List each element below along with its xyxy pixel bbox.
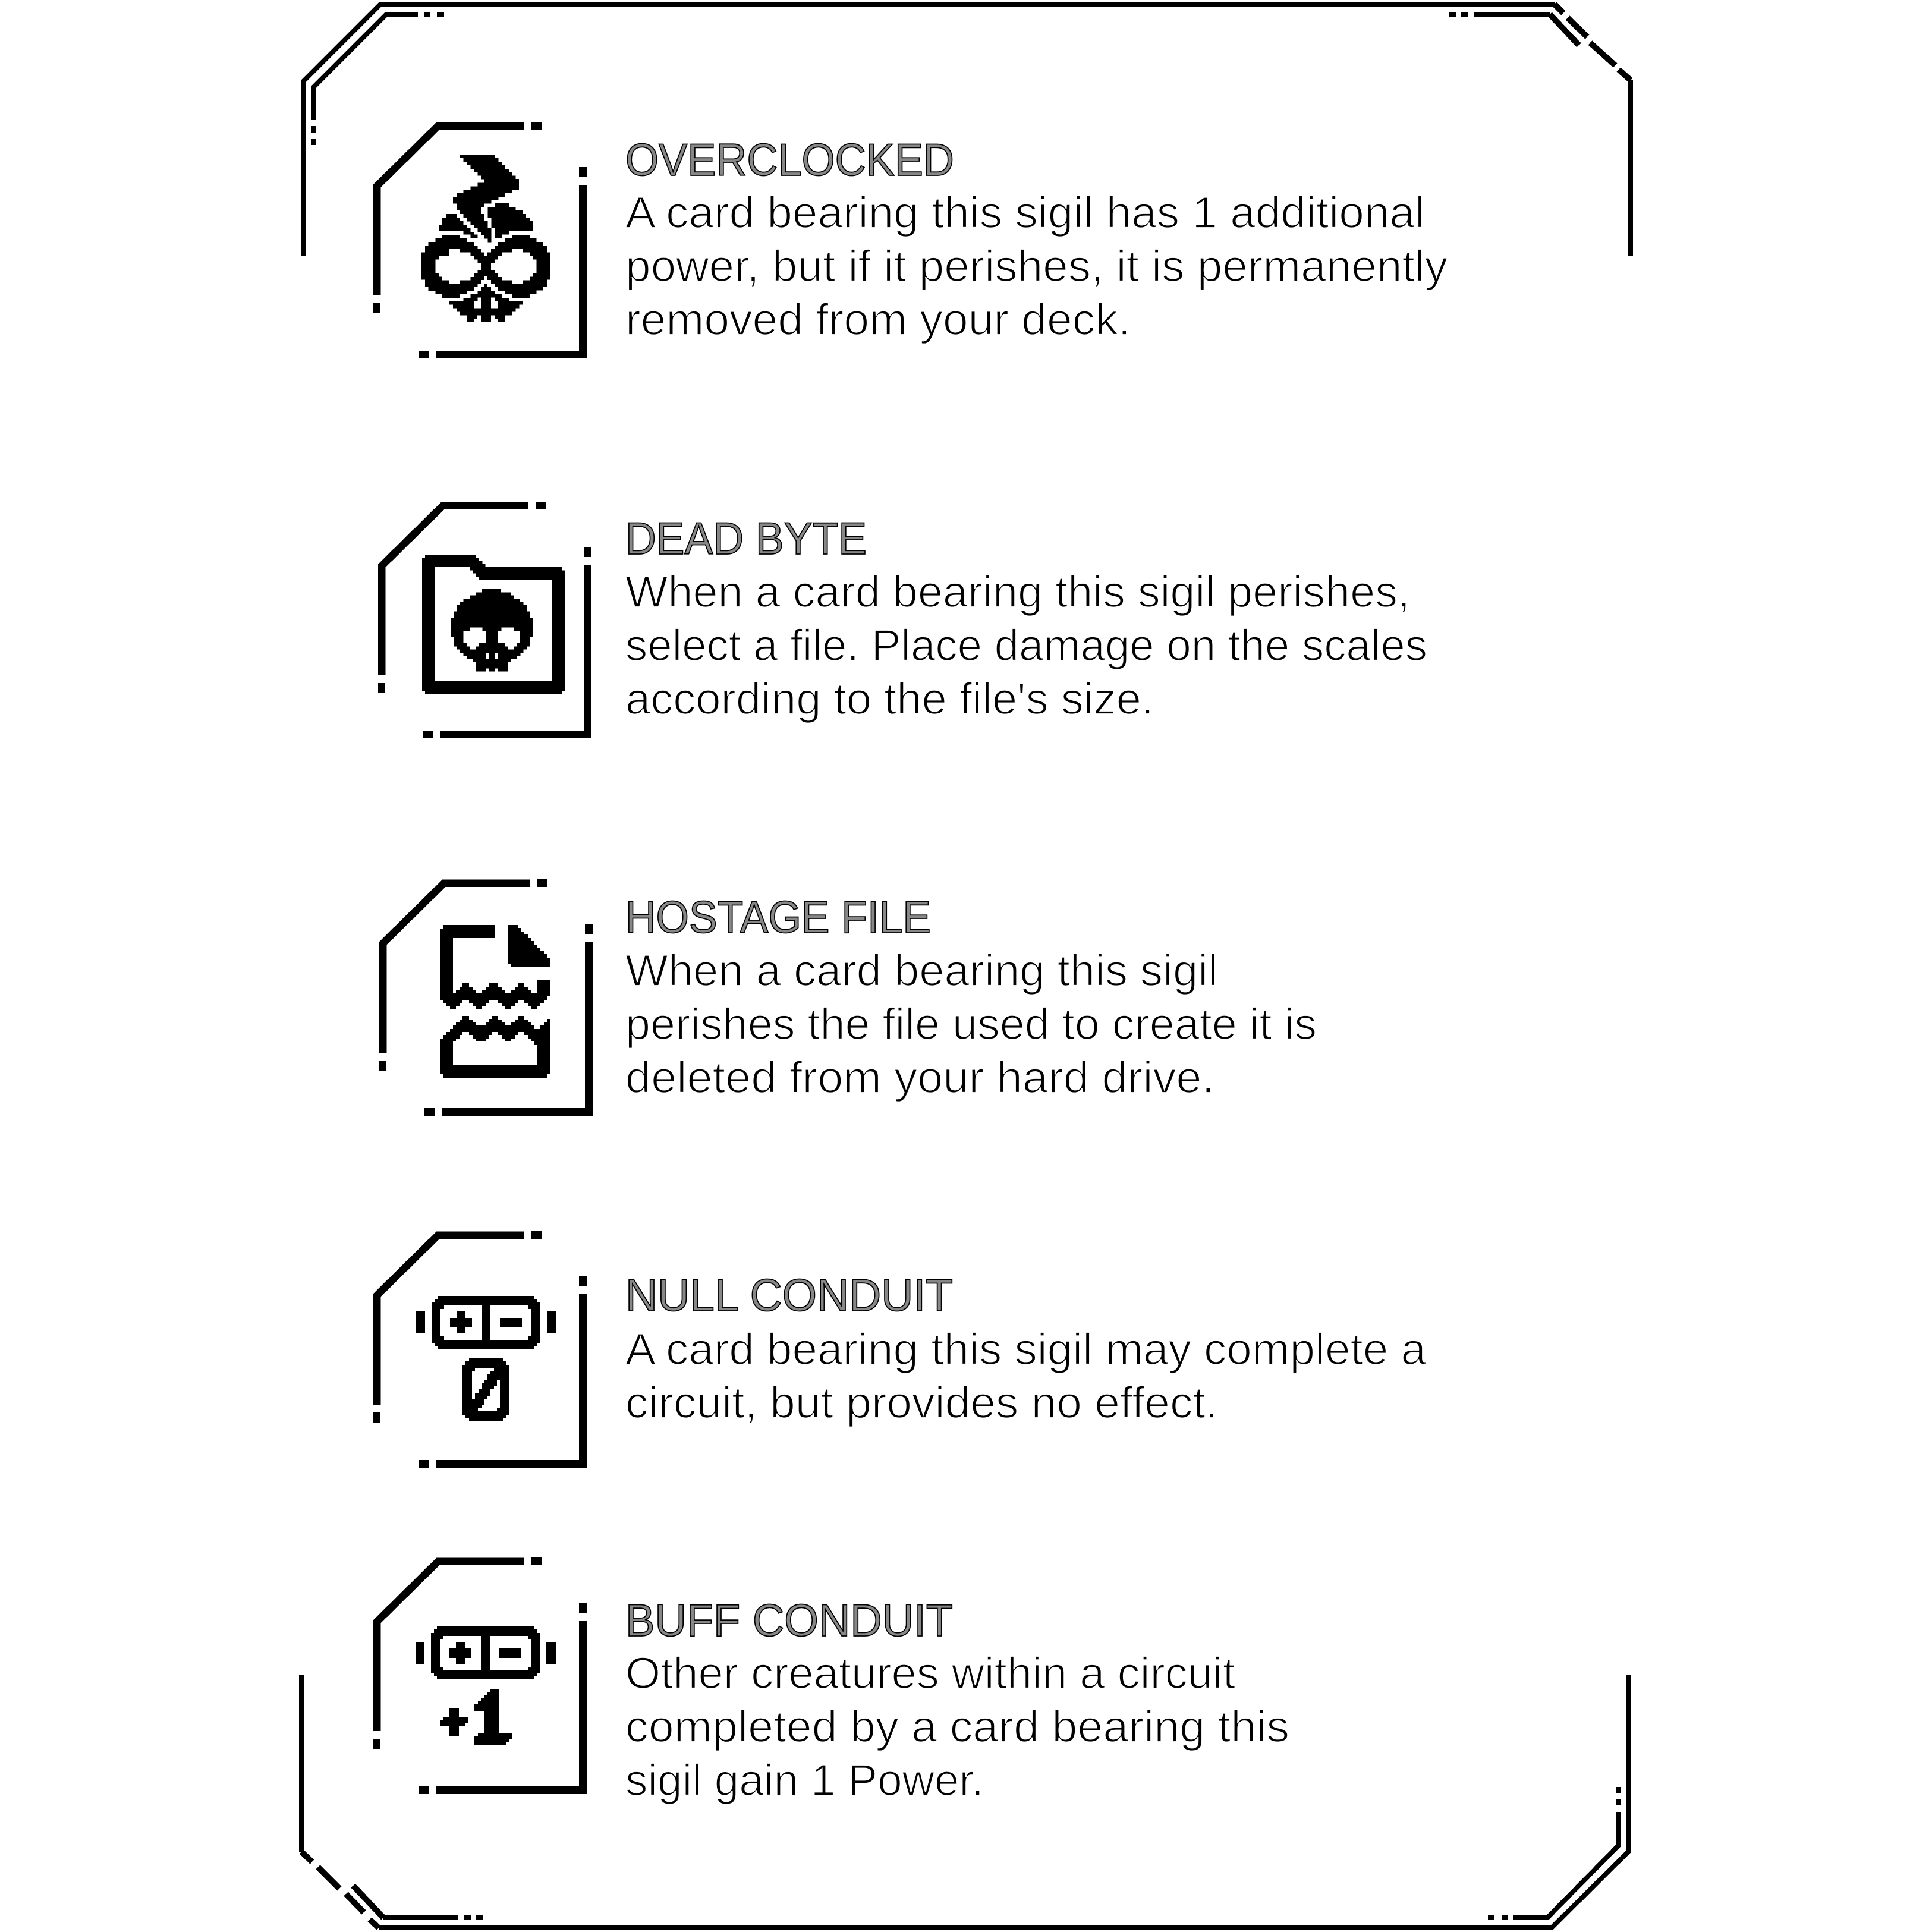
heading: hostage file: HOSTAGE FILE bbox=[625, 892, 931, 943]
heading: dead byte: DEAD BYTE bbox=[625, 514, 867, 564]
icon: battery with zero bbox=[416, 1296, 556, 1421]
panel: hostage file bbox=[379, 879, 1317, 1116]
text: dead byte description: according to the file's size. bbox=[625, 674, 1154, 723]
heading: overclocked: OVERCLOCKED bbox=[625, 135, 954, 185]
icon frame: overclocked bbox=[373, 122, 587, 358]
text: overclocked description: power, but if it perishes, it is permanently bbox=[625, 241, 1448, 291]
text: dead byte description: select a file. Place damage on the scales bbox=[625, 621, 1427, 670]
text: buff conduit description: completed by a card bearing this bbox=[625, 1702, 1289, 1751]
panel: dead byte bbox=[378, 502, 1427, 738]
outer frame bbox=[301, 4, 1631, 1928]
panel: overclocked bbox=[373, 122, 1448, 358]
text: dead byte description: When a card bearing this sigil perishes, bbox=[625, 567, 1410, 616]
text: null conduit description bbox=[625, 1324, 1427, 1427]
icon frame: dead byte bbox=[378, 502, 591, 738]
icon: lightning skull with infinity eyes bbox=[421, 155, 550, 322]
panel: null conduit bbox=[373, 1231, 1427, 1468]
heading: null conduit: NULL CONDUIT bbox=[625, 1270, 953, 1321]
icon: torn file bbox=[440, 925, 550, 1078]
heading: buff conduit: BUFF CONDUIT bbox=[625, 1596, 953, 1646]
text: null conduit description: A card bearing this sigil may complete a bbox=[625, 1324, 1427, 1374]
text: dead byte description bbox=[625, 567, 1427, 723]
text: hostage file description bbox=[625, 946, 1317, 1102]
icon: folder with skull bbox=[422, 555, 565, 694]
panel: buff conduit bbox=[373, 1557, 1289, 1805]
text: hostage file description: perishes the file used to create it is bbox=[625, 999, 1317, 1049]
icon: battery with plus one bbox=[416, 1626, 556, 1745]
icon frame: buff conduit bbox=[373, 1557, 587, 1794]
text: buff conduit description bbox=[625, 1648, 1289, 1805]
text: buff conduit description: sigil gain 1 Power. bbox=[625, 1755, 984, 1805]
text: overclocked description: A card bearing this sigil has 1 additional bbox=[625, 188, 1425, 237]
text: overclocked description bbox=[625, 188, 1448, 344]
text: buff conduit description: Other creatures within a circuit bbox=[625, 1648, 1235, 1698]
text: hostage file description: When a card bearing this sigil bbox=[625, 946, 1218, 995]
text: null conduit description: circuit, but provides no effect. bbox=[625, 1378, 1218, 1427]
icon frame: hostage file bbox=[379, 879, 593, 1116]
text: overclocked description: removed from your deck. bbox=[625, 295, 1131, 344]
text: hostage file description: deleted from your hard drive. bbox=[625, 1053, 1214, 1102]
icon frame: null conduit bbox=[373, 1231, 587, 1468]
